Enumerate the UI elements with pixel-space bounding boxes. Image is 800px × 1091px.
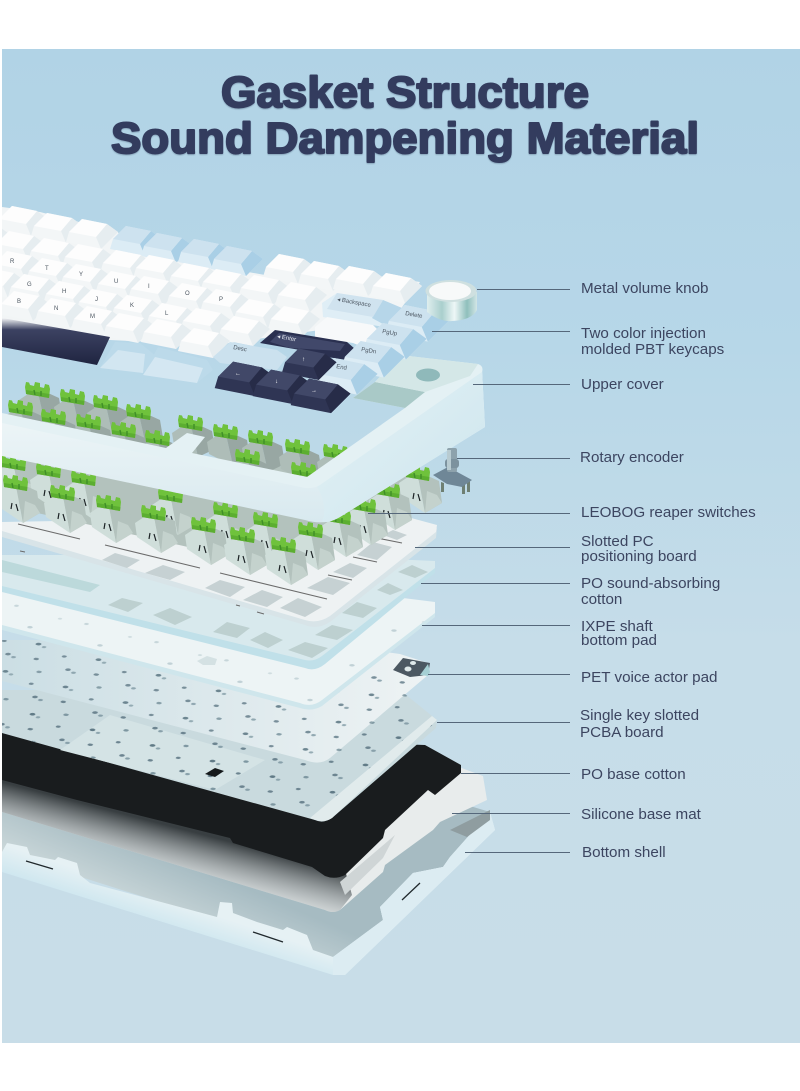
keycaps: [0, 206, 449, 413]
right column Delete, PgUp, PgDn, End: Delete: [405, 311, 423, 320]
label: keycaps: Two color injection: [581, 325, 706, 342]
backspace key: [322, 293, 402, 328]
title: Gasket Structure: [221, 68, 589, 117]
arrow keys navy: →: [311, 388, 317, 394]
layer: bottom shell: [2, 800, 495, 975]
home row ASDF: G: [27, 282, 32, 288]
shift row ZXCV: B: [17, 299, 21, 305]
arrow keys navy: ↑: [302, 357, 305, 363]
leader lines: [368, 290, 570, 852]
blue bottom-row keys: Desc: [233, 345, 247, 353]
layer: PO base cotton: [2, 730, 461, 878]
shift row ZXCV: M: [90, 314, 95, 320]
label: PO cotton: cotton: [581, 591, 622, 608]
label: PC board: positioning board: [581, 548, 697, 565]
wide navy enter key: ◂ Enter: [277, 334, 296, 343]
space bar navy: [2, 318, 110, 365]
layer: single key slotted PCBA board: [2, 690, 437, 822]
labels: [580, 280, 756, 861]
shift row ZXCV: N: [54, 306, 58, 312]
letter row QWERTY: Y: [79, 272, 83, 278]
title: Sound Dampening Material: [111, 114, 699, 163]
label: PET: PET voice actor pad: [581, 669, 717, 686]
home row ASDF: K: [130, 303, 134, 309]
pipe key: [315, 317, 378, 347]
right column Delete, PgUp, PgDn, End: [363, 305, 449, 360]
letter row QWERTY: O: [185, 291, 190, 297]
layer: IXPE shaft bottom pad: [2, 585, 435, 710]
letter row QWERTY: I: [148, 284, 150, 290]
label: keycaps: molded PBT keycaps: [581, 341, 725, 358]
arrow keys navy: [215, 349, 350, 413]
number row: [0, 223, 327, 312]
home row ASDF: J: [95, 297, 98, 303]
keycap base: [2, 207, 420, 345]
letter row QWERTY: U: [114, 279, 118, 285]
upper cover frame: [2, 355, 485, 522]
letter row QWERTY: R: [10, 259, 15, 265]
right column lower keys: [314, 341, 405, 395]
letter row QWERTY: P: [219, 297, 223, 303]
letter row QWERTY: T: [45, 266, 49, 272]
layer: PET voice actor pad: [2, 640, 430, 763]
blue bottom-row keys: [100, 342, 287, 383]
label: switches: LEOBOG reaper switches: [581, 504, 756, 521]
label: upper cover: Upper cover: [581, 376, 664, 393]
label: PCBA: Single key slotted: [580, 707, 699, 724]
layer: PO sound-absorbing cotton: [2, 555, 435, 669]
label: bottom shell: Bottom shell: [582, 844, 666, 861]
home row ASDF: [0, 268, 270, 346]
label: PO base cotton: PO base cotton: [581, 766, 686, 783]
home row ASDF: H: [62, 289, 66, 295]
label: metal volume knob: Metal volume knob: [581, 280, 708, 297]
rotary encoder: [433, 448, 472, 494]
label: PO cotton: PO sound-absorbing: [581, 575, 720, 592]
label: rotary encoder: Rotary encoder: [580, 449, 684, 466]
label: IXPE: bottom pad: [581, 632, 657, 649]
layer: slotted PC positioning board: [2, 515, 437, 627]
layer: silicone base mat: [2, 745, 487, 912]
backspace key: ◂ Backspace: [337, 297, 372, 309]
title: [111, 68, 699, 163]
home row ASDF: L: [165, 311, 169, 317]
shift row ZXCV: [0, 291, 230, 358]
letter row QWERTY: [0, 251, 320, 336]
right column lower keys: End: [336, 364, 347, 372]
right column Delete, PgUp, PgDn, End: PgUp: [382, 329, 398, 338]
arrow keys navy: ↓: [275, 379, 278, 385]
label: IXPE: IXPE shaft: [581, 618, 654, 635]
label: PC board: Slotted PC: [581, 533, 654, 550]
function row: [0, 206, 422, 303]
metal volume knob: [426, 280, 477, 321]
switches seen through the cover opening: [2, 382, 360, 504]
label: silicone: Silicone base mat: [581, 806, 702, 823]
arrow keys navy: ←: [235, 371, 241, 377]
label: PCBA: PCBA board: [580, 724, 664, 741]
wide navy enter key: [260, 330, 355, 360]
LEOBOG reaper switches, lower rows: [0, 455, 442, 585]
right column lower keys: PgDn: [361, 347, 376, 356]
